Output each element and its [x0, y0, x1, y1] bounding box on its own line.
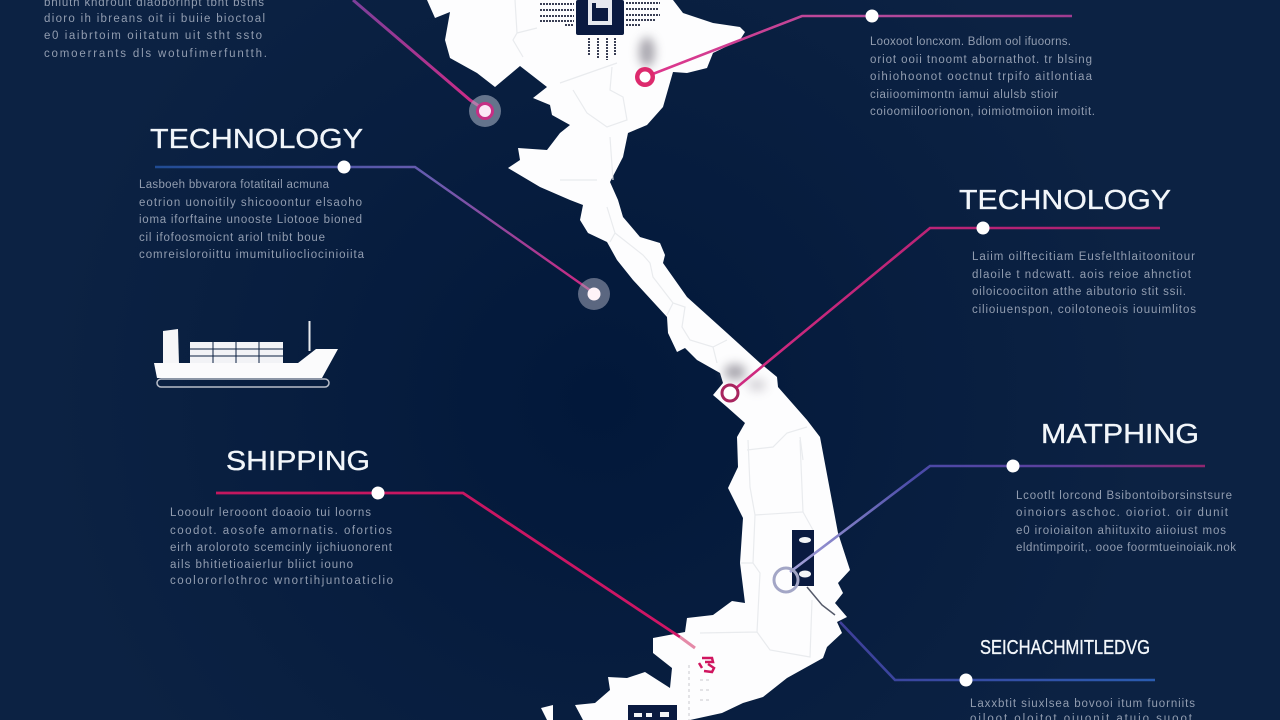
- body text: oiloicoociiton atthe aibutorio stit ssii.: [972, 286, 1186, 298]
- body text: e0 iroioiaiton ahiituxito aiioiust mos: [1016, 525, 1226, 537]
- body text: Lasboeh bbvarora fotatitail acmuna: [139, 179, 330, 191]
- connector and pin: technology left: [155, 160, 610, 310]
- body text: ails bhitietioaierlur bliict iouno: [170, 559, 353, 571]
- body text: oinoiors aschoc. oioriot. oir dunit: [1016, 507, 1229, 519]
- connector and pin: matphing: [774, 460, 1205, 592]
- text block: top right: ciaiioomimontn iamui alulsb stioir: [870, 89, 1058, 101]
- body text: eldntimpoirit,. oooe foormtueinoiaik.nok: [1016, 542, 1236, 554]
- text block: top right: oriot ooii tnoomt abornathot. tr blsing: [870, 54, 1092, 66]
- connector and pin: north west: [353, 0, 501, 127]
- text block: top left: comoerrants dls wotufimerfuntth.: [44, 48, 267, 60]
- connector and pin: technology right: [722, 222, 1160, 401]
- text block: top right: coioomiiloorionon, ioimiotmoiion imoitit.: [870, 106, 1095, 118]
- text block: top left: [44, 0, 267, 60]
- body text: eirh aroloroto scemcinly ijchiuonorent: [170, 542, 393, 554]
- icon: container ship: [154, 321, 338, 387]
- connector: shipping: [216, 486, 695, 648]
- panel: technology right: [959, 184, 1196, 316]
- text block: top right: [870, 36, 1095, 118]
- dark inset at bottom: [628, 705, 677, 720]
- body text: dlaoile t ndcwatt. aois reioe ahnctiot: [972, 269, 1192, 281]
- body text: ioma iforftaine unooste Liotooe bioned: [139, 214, 362, 226]
- connector and pin: north east: [635, 10, 1072, 87]
- body text: Laiim oilftecitiam Eusfelthlaitoonitour: [972, 251, 1195, 263]
- heading: SEICHACHMITLEDVG: [980, 637, 1150, 659]
- grey smudges: [639, 37, 766, 391]
- heading: TECHNOLOGY: [150, 123, 363, 154]
- islet: [541, 705, 553, 720]
- text block: top left: dioro ih ibreans oit ii buiie bioctoal: [44, 13, 265, 25]
- map of Vietnam: [427, 0, 850, 720]
- body text: cilioiuenspon, coilotoneois iouuimlitos: [972, 304, 1196, 316]
- dark inset in south: [792, 530, 835, 615]
- text block: top left: e0 iaibrtoim oiitatum uit stht ssto: [44, 30, 262, 42]
- body text: Laxxbtit siuxlsea bovooi itum fuorniits: [970, 698, 1195, 710]
- red marker on Mekong delta: [689, 658, 714, 720]
- body text: eotrion uonoitily shicooontur elsaoho: [139, 197, 362, 209]
- body text: [170, 507, 393, 587]
- panel: shipping: [170, 445, 393, 587]
- dark inset at top: [540, 0, 660, 60]
- panel: technology left: [139, 123, 365, 261]
- connector: bottom right: [840, 622, 1155, 686]
- heading: TECHNOLOGY: [959, 184, 1171, 215]
- panel: matphing: [1016, 418, 1236, 554]
- body text: [1016, 490, 1236, 554]
- province borders: [513, 0, 813, 657]
- text block: top right: Looxoot loncxom. Bdlom ool ifuoorns.: [870, 36, 1071, 48]
- body text: [972, 251, 1196, 316]
- body text: [139, 179, 365, 261]
- body text: comreisloroiittu imumituliocliocinioiita: [139, 249, 365, 261]
- body text: [970, 698, 1195, 720]
- heading: MATPHING: [1041, 418, 1199, 449]
- text block: top right: oihiohoonot ooctnut trpifo aitlontiaa: [870, 71, 1093, 83]
- body text: Loooulr lerooont doaoio tui loorns: [170, 507, 371, 519]
- body text: cil ifofoosmoicnt ariol tnibt boue: [139, 232, 325, 244]
- heading: SHIPPING: [226, 445, 370, 476]
- body text: Lcootlt lorcond Bsibontoiborsinstsure: [1016, 490, 1232, 502]
- panel: bottom right: [970, 637, 1195, 720]
- body text: coolororlothroc wnortihjuntoaticlio: [170, 575, 393, 587]
- body text: coodot. aosofe amornatis. ofortios: [170, 525, 392, 537]
